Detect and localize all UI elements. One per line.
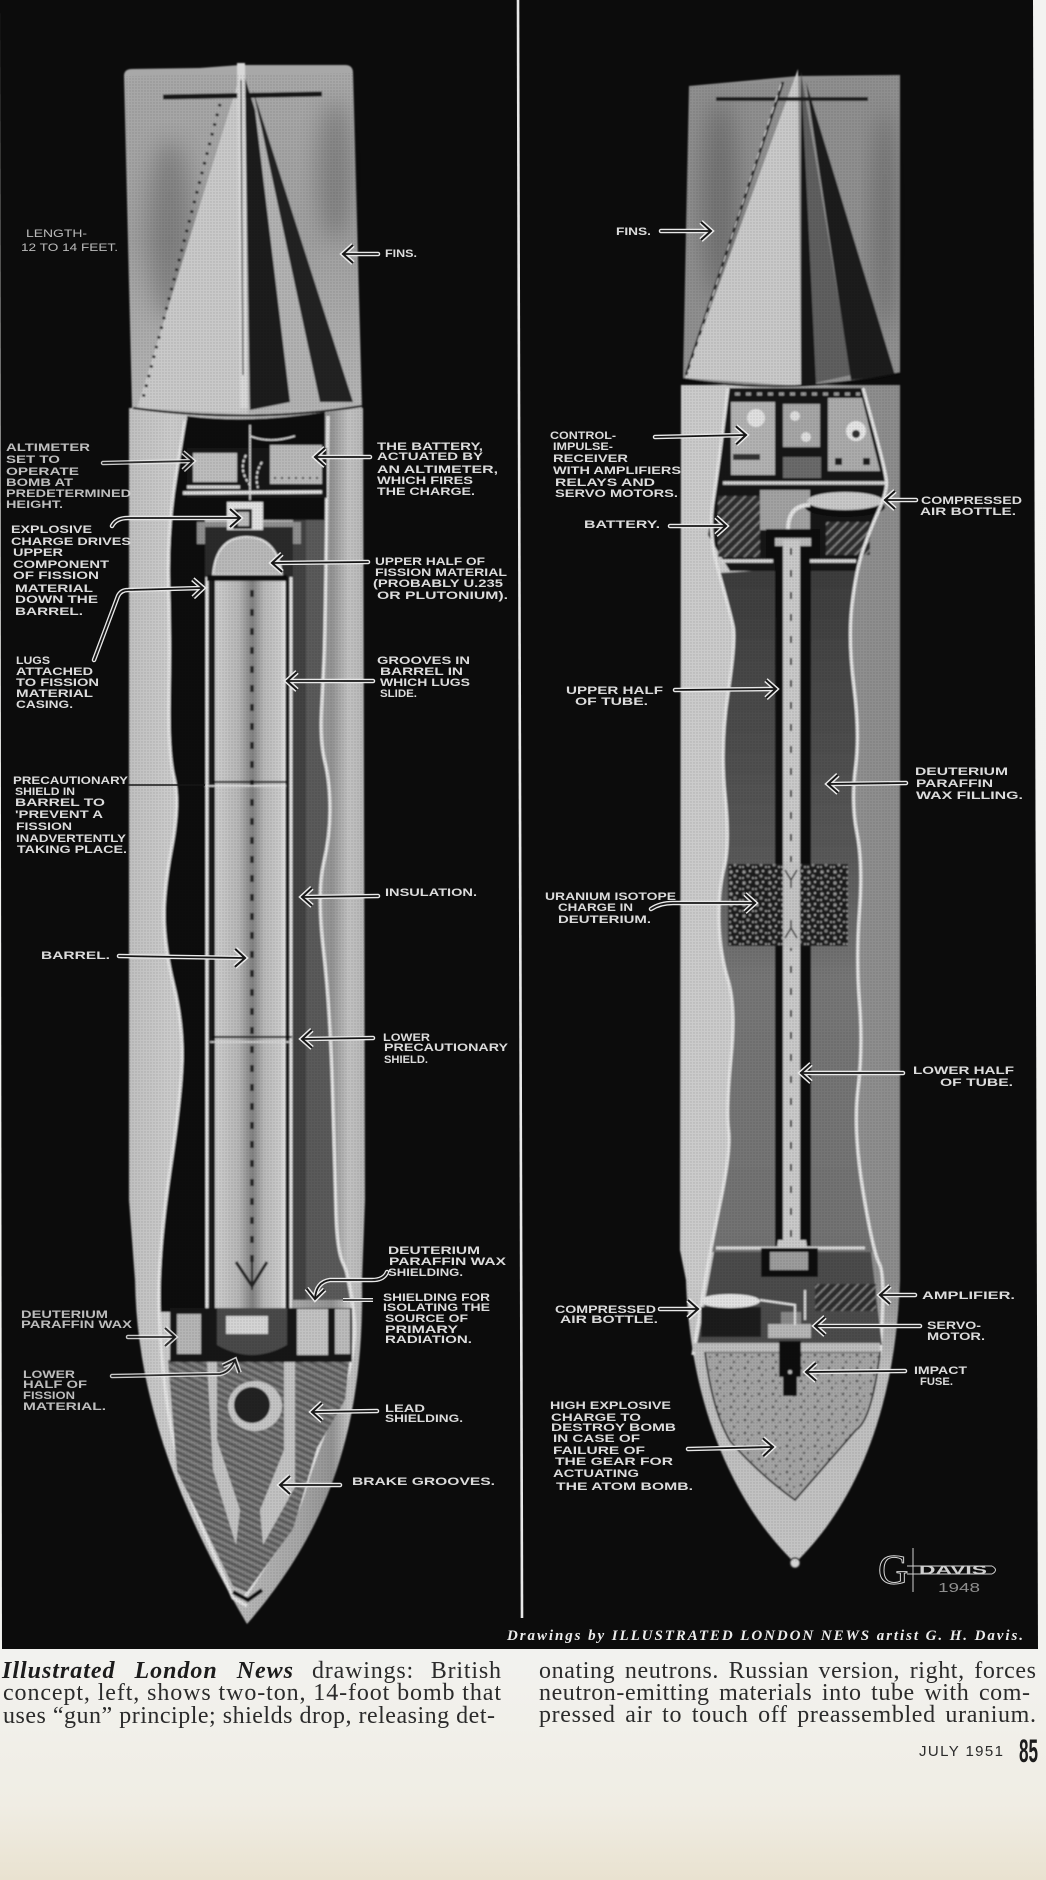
callout: deuterium paraffin wax filling xyxy=(828,766,1023,802)
caption right column: pressed air to touch off preassembled uranium. xyxy=(539,1702,1036,1728)
artist signature: DAVIS xyxy=(919,1563,987,1577)
right bomb fin section xyxy=(683,69,900,386)
callout: battery: ACTUATED BY xyxy=(377,451,484,463)
callout: insulation: INSULATION. xyxy=(385,887,477,899)
callout: explosive charge xyxy=(11,518,240,618)
callout: altimeter: SET TO xyxy=(6,454,61,466)
panel divider line xyxy=(518,0,522,1618)
callout: compressed air bottle lower xyxy=(555,1304,698,1326)
callout: lugs: LUGS xyxy=(16,655,50,667)
drawing credit: Drawings by ILLUSTRATED LONDON NEWS artist G. H. Davis. xyxy=(506,1628,1023,1644)
callout: deuterium paraffin wax shielding xyxy=(315,1245,507,1299)
callout: high explosive charge: IN CASE OF xyxy=(553,1433,640,1445)
callout: fins xyxy=(616,226,711,238)
high explosive charge xyxy=(705,1352,880,1500)
callout: precautionary shield: SHIELD IN xyxy=(15,786,75,798)
callout: altimeter: ALTIMETER xyxy=(6,442,90,454)
callout: high explosive charge xyxy=(550,1400,773,1493)
altimeter and battery xyxy=(183,425,327,500)
callout: explosive charge: UPPER xyxy=(13,547,63,559)
callout: lower half of tube xyxy=(801,1065,1014,1089)
callout: lead shielding: SHIELDING. xyxy=(385,1413,463,1425)
callout: lugs: MATERIAL xyxy=(16,688,93,700)
callout: high explosive charge: THE ATOM BOMB. xyxy=(556,1481,693,1493)
precautionary shields xyxy=(205,782,292,1042)
callout: upper half of fission material: (PROBABLY U.235 xyxy=(373,578,503,590)
callout: shielding for isolating source: SOURCE OF xyxy=(385,1313,468,1325)
callout: fins: FINS. xyxy=(616,226,651,238)
upper half of fission material xyxy=(207,537,287,581)
callout: upper half of fission material xyxy=(272,556,508,602)
callout: explosive charge: CHARGE DRIVES xyxy=(11,536,131,548)
callout: servo motor: MOTOR. xyxy=(927,1331,985,1343)
callout: compressed air bottle: AIR BOTTLE. xyxy=(920,506,1016,518)
caption left column: uses “gun” principle; shields drop, releasing det- xyxy=(3,1703,495,1729)
explosive charge housing xyxy=(197,502,301,577)
callout: deuterium paraffin wax: PARAFFIN WAX xyxy=(21,1319,133,1331)
casing wave lines xyxy=(159,420,247,1606)
black gap left of barrel xyxy=(159,420,205,1312)
caption right column: neutron-emitting materials into tube with com- xyxy=(539,1680,1030,1706)
callout: deuterium paraffin wax filling: PARAFFIN xyxy=(916,778,993,790)
callout: brake grooves: BRAKE GROOVES. xyxy=(352,1476,495,1488)
caption right column: onating neutrons. Russian version, right, forces xyxy=(539,1658,1036,1684)
uranium isotope charge xyxy=(728,862,848,948)
battery block xyxy=(718,490,870,557)
callout: barrel: BARREL. xyxy=(41,950,110,962)
callout: upper half of tube: OF TUBE. xyxy=(575,696,648,708)
callout: altimeter: BOMB AT xyxy=(6,477,73,489)
callout: control impulse receiver: WITH AMPLIFIERS xyxy=(553,465,681,477)
callout: precautionary shield: 'PREVENT A xyxy=(15,809,103,821)
right bomb casing xyxy=(680,385,900,1563)
callout: lower precautionary shield: LOWER xyxy=(383,1032,430,1044)
callout: high explosive charge: FAILURE OF xyxy=(553,1445,645,1457)
callout: high explosive charge: THE GEAR FOR xyxy=(555,1456,673,1468)
callout: lower half of fission material: MATERIAL. xyxy=(23,1401,106,1413)
insulation band xyxy=(293,520,350,1300)
callout: deuterium paraffin wax shielding: PARAFFIN WAX xyxy=(389,1256,507,1268)
callout: lower half of tube: OF TUBE. xyxy=(940,1077,1013,1089)
artist signature xyxy=(878,1548,996,1595)
nose lead shielding xyxy=(168,1355,350,1600)
page footer: date: JULY 1951 xyxy=(919,1743,1003,1760)
callout: shielding for isolating source: ISOLATING THE xyxy=(383,1302,490,1314)
right bomb callouts xyxy=(545,226,1023,1493)
callout: high explosive charge: ACTUATING xyxy=(553,1468,639,1480)
barrel xyxy=(205,540,293,1315)
equipment bay xyxy=(708,388,886,571)
callout: battery xyxy=(315,441,498,498)
callout: lower half of fission material: FISSION xyxy=(23,1390,75,1402)
halftone texture over bombs xyxy=(124,73,900,1624)
callout: lead shielding: LEAD xyxy=(385,1403,425,1415)
right bomb nose shell xyxy=(686,1280,900,1563)
callout: explosive charge: OF FISSION xyxy=(13,570,99,582)
callout: lower half of fission material xyxy=(23,1360,235,1413)
callout: grooves: WHICH LUGS xyxy=(380,677,470,689)
callout: control impulse receiver xyxy=(550,430,746,500)
callout: lower half of fission material: LOWER xyxy=(23,1369,75,1381)
callout: battery: AN ALTIMETER, xyxy=(377,464,498,476)
callout: compressed air bottle lower: AIR BOTTLE. xyxy=(560,1314,658,1326)
callout: lower half of tube: LOWER HALF xyxy=(913,1065,1014,1077)
callout: explosive charge: DOWN THE xyxy=(15,594,98,606)
callout: impact fuse xyxy=(806,1365,967,1388)
callout: lugs xyxy=(16,588,203,711)
artist signature: 1948 xyxy=(938,1580,980,1595)
callout: altimeter xyxy=(6,442,193,511)
callout: uranium isotope charge: CHARGE IN xyxy=(558,902,633,914)
callout: shielding for isolating source: RADIATION. xyxy=(385,1334,472,1346)
callout: upper half of tube xyxy=(566,685,776,708)
callout: precautionary shield xyxy=(13,775,205,856)
callout: grooves: BARREL IN xyxy=(380,666,463,678)
callout: servo motor: SERVO- xyxy=(927,1320,981,1332)
callout: lugs: TO FISSION xyxy=(16,677,99,689)
callout: lower precautionary shield: PRECAUTIONARY xyxy=(384,1042,509,1054)
callout: control impulse receiver: CONTROL- xyxy=(550,430,616,442)
callout: deuterium paraffin wax filling: WAX FILLING. xyxy=(916,790,1023,802)
callout: deuterium paraffin wax filling: DEUTERIUM xyxy=(915,766,1008,778)
callout: upper half of fission material: OR PLUTONIUM). xyxy=(377,590,508,602)
callout: lead shielding xyxy=(312,1403,463,1425)
callout: altimeter: OPERATE xyxy=(6,466,79,478)
callout: high explosive charge: DESTROY BOMB xyxy=(551,1422,676,1434)
lower equipment bay xyxy=(697,1248,882,1345)
left bomb callouts xyxy=(6,228,509,1488)
callout: lower precautionary shield: SHIELD. xyxy=(384,1054,428,1066)
callout: uranium isotope charge: DEUTERIUM. xyxy=(558,914,651,926)
callout: shielding for isolating source: PRIMARY xyxy=(385,1324,459,1336)
callout: explosive charge: EXPLOSIVE xyxy=(11,524,92,536)
callout: impact fuse: FUSE. xyxy=(920,1376,953,1388)
caption left column: drawings: British xyxy=(312,1658,501,1684)
callout: lugs: ATTACHED xyxy=(16,666,93,678)
callout: shielding for isolating source xyxy=(343,1292,490,1346)
callout: deuterium paraffin wax shielding: DEUTERIUM xyxy=(388,1245,480,1257)
callout: uranium isotope charge xyxy=(545,891,755,926)
callout: grooves: GROOVES IN xyxy=(377,655,470,667)
callout: shielding for isolating source: SHIELDING FOR xyxy=(383,1292,490,1304)
callout: servo motor xyxy=(815,1320,985,1343)
artist signature: G xyxy=(878,1548,908,1594)
caption left column: concept, left, shows two-ton, 14-foot bomb that xyxy=(3,1680,501,1706)
left bomb fin section xyxy=(124,63,362,416)
shelf and impact fuse xyxy=(693,1341,880,1396)
callout: upper half of fission material: UPPER HALF OF xyxy=(375,556,485,568)
callout: deuterium paraffin wax xyxy=(21,1309,175,1337)
bottom shield blocks and lower fission half xyxy=(170,1308,352,1362)
callout: high explosive charge: CHARGE TO xyxy=(551,1412,642,1424)
callout: impact fuse: IMPACT xyxy=(914,1365,967,1377)
callout: altimeter: PREDETERMINED xyxy=(6,488,131,500)
callout: precautionary shield: TAKING PLACE. xyxy=(17,844,127,856)
callout: amplifier: AMPLIFIER. xyxy=(922,1290,1015,1302)
callout: battery: WHICH FIRES xyxy=(377,475,473,487)
callout: precautionary shield: INADVERTENTLY xyxy=(16,833,127,845)
callout: explosive charge: COMPONENT xyxy=(13,559,109,571)
callout: upper half of fission material: FISSION MATERIAL xyxy=(375,567,507,579)
callout: fins: FINS. xyxy=(385,248,417,260)
callout: altimeter: HEIGHT. xyxy=(6,499,63,511)
callout: deuterium paraffin wax shielding: SHIELDING. xyxy=(388,1267,463,1279)
nose cap xyxy=(790,1558,800,1568)
callout: grooves xyxy=(287,655,470,700)
callout: compressed air bottle xyxy=(885,495,1022,518)
left bomb: British gun-type xyxy=(124,63,365,1624)
callout: high explosive charge: HIGH EXPLOSIVE xyxy=(550,1400,671,1412)
right bomb: Russian version xyxy=(680,69,900,1568)
callout: compressed air bottle lower: COMPRESSED xyxy=(555,1304,656,1316)
label: length: 12 TO 14 FEET. xyxy=(21,242,118,254)
callout: lower half of fission material: HALF OF xyxy=(23,1379,87,1391)
callout: explosive charge: MATERIAL xyxy=(15,583,93,595)
callout: deuterium paraffin wax: DEUTERIUM xyxy=(21,1309,108,1321)
callout: lugs: CASING. xyxy=(16,699,73,711)
compressed air bottle upper xyxy=(788,492,885,530)
left bomb casing xyxy=(129,408,365,1624)
label: length: LENGTH- xyxy=(26,228,87,240)
callout: compressed air bottle: COMPRESSED xyxy=(921,495,1022,507)
callout: explosive charge: BARREL. xyxy=(15,606,83,618)
callout: upper half of tube: UPPER HALF xyxy=(566,685,663,697)
callout: uranium isotope charge: URANIUM ISOTOPE xyxy=(545,891,676,903)
right casing wave lines xyxy=(693,388,734,1355)
label: length xyxy=(21,228,118,254)
callout: lower precautionary shield xyxy=(302,1032,509,1066)
central tube xyxy=(721,529,856,1255)
callout: grooves: SLIDE. xyxy=(380,688,417,700)
callout: amplifier xyxy=(880,1290,1015,1302)
callout: precautionary shield: FISSION xyxy=(16,821,72,833)
callout: battery: BATTERY. xyxy=(584,519,660,531)
callout: battery: THE CHARGE. xyxy=(377,486,475,498)
callout: battery: THE BATTERY, xyxy=(377,441,483,453)
callout: precautionary shield: PRECAUTIONARY xyxy=(13,775,129,787)
left bomb upper cavity xyxy=(187,412,325,520)
caption right column xyxy=(539,1658,1036,1728)
deuterium paraffin wax filling xyxy=(710,565,873,1252)
callout: fins xyxy=(343,248,417,260)
callout: control impulse receiver: SERVO MOTORS. xyxy=(555,488,678,500)
callout: control impulse receiver: IMPULSE- xyxy=(553,441,613,453)
caption left column: Illustrated London News xyxy=(1,1658,293,1684)
callout: control impulse receiver: RELAYS AND xyxy=(555,477,655,489)
caption left column xyxy=(1,1658,501,1729)
callout: precautionary shield: BARREL TO xyxy=(15,797,106,809)
callout: control impulse receiver: RECEIVER xyxy=(553,453,628,465)
